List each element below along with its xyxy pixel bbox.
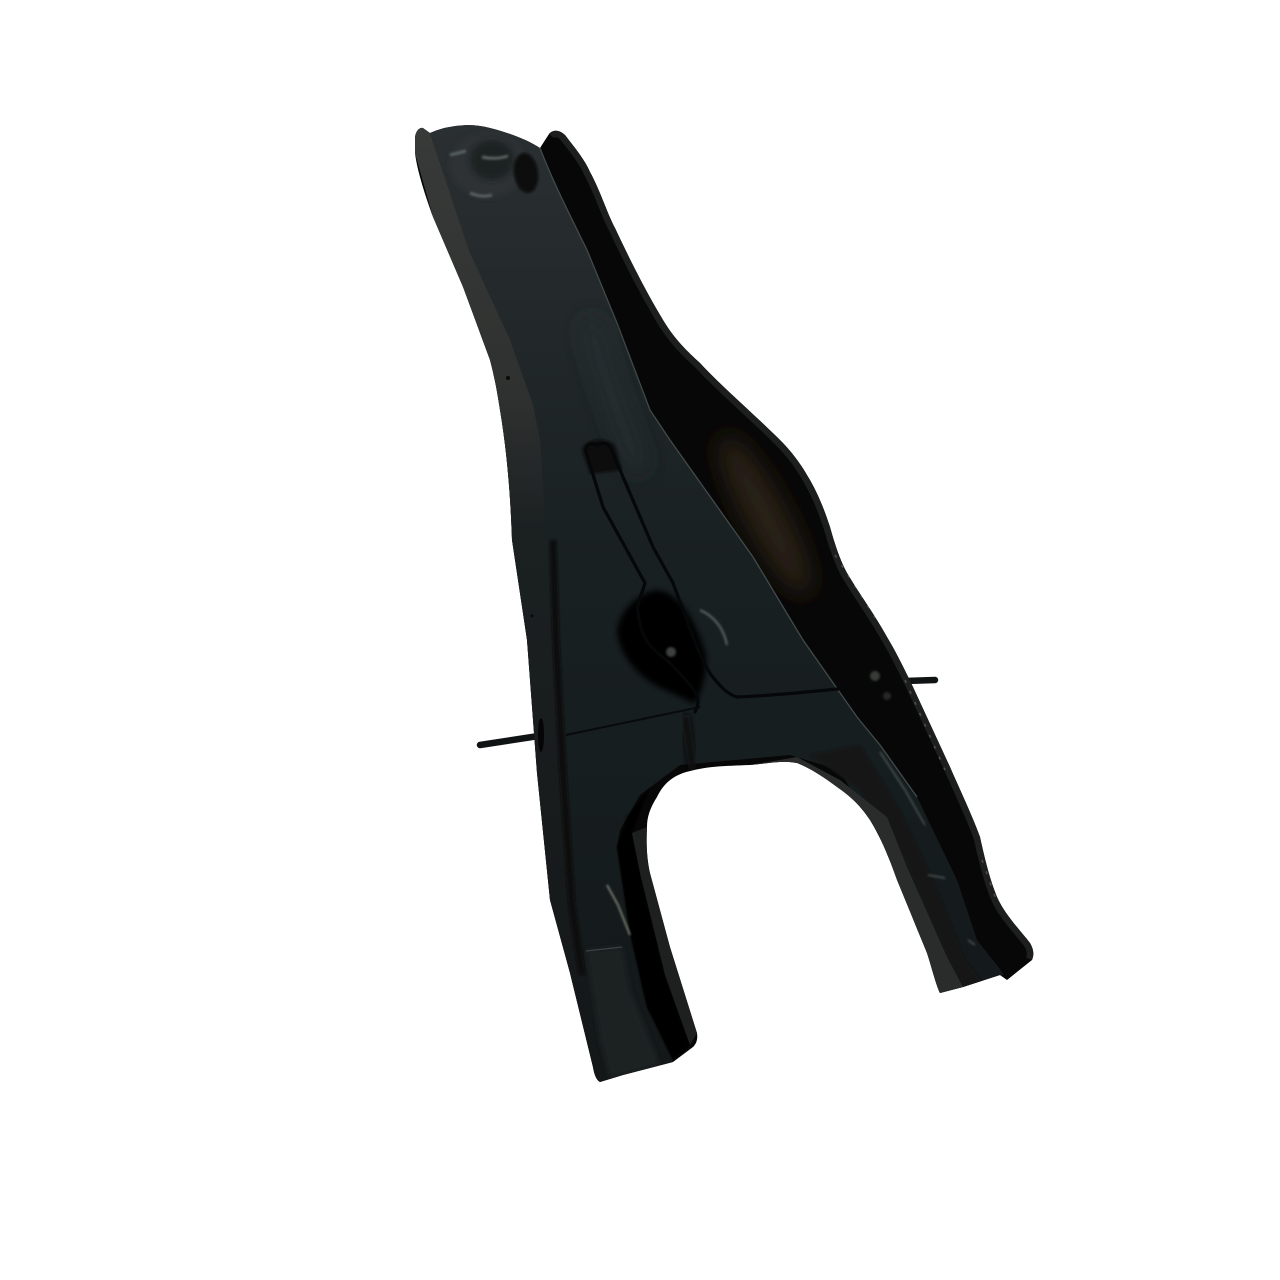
web edge highlight — [540, 148, 917, 797]
right pin end — [905, 680, 935, 681]
flange dark seam — [553, 540, 582, 975]
fork body — [400, 110, 1050, 1100]
right rim holes — [870, 671, 880, 681]
right flange rim — [549, 131, 1033, 960]
right rim speckles — [835, 555, 998, 905]
left leg facet line — [586, 947, 622, 951]
dimple highlight — [700, 610, 727, 645]
left pin end — [480, 735, 545, 745]
main web face — [430, 125, 1003, 1090]
weld seam — [685, 715, 693, 770]
spring bolt glint — [666, 647, 676, 657]
crease across the web — [566, 707, 700, 735]
wire: right arm — [597, 443, 880, 697]
left flange face — [415, 128, 600, 1085]
boss highlights — [450, 151, 508, 196]
boss hole — [513, 152, 539, 194]
slot in flange — [538, 718, 544, 752]
web sheen — [590, 320, 640, 470]
inner channel warm reflection — [714, 434, 816, 596]
left leg rim — [632, 827, 697, 1045]
boss patch — [450, 133, 526, 197]
left leg black groove — [616, 812, 672, 1058]
base silhouette — [400, 110, 1050, 1100]
spring wire — [586, 443, 880, 712]
boss inner — [470, 140, 514, 180]
flange rivet dots — [506, 376, 510, 380]
wire: left arm — [586, 444, 698, 712]
right leg inner face — [750, 757, 963, 995]
right leg web shading — [810, 745, 985, 990]
photo: clutch release fork — [415, 125, 1034, 1082]
dimple shadow — [617, 590, 706, 704]
left leg tip facet — [586, 947, 660, 1078]
slot — [582, 440, 622, 474]
left leg highlight — [607, 885, 630, 935]
right leg glints — [880, 752, 975, 945]
